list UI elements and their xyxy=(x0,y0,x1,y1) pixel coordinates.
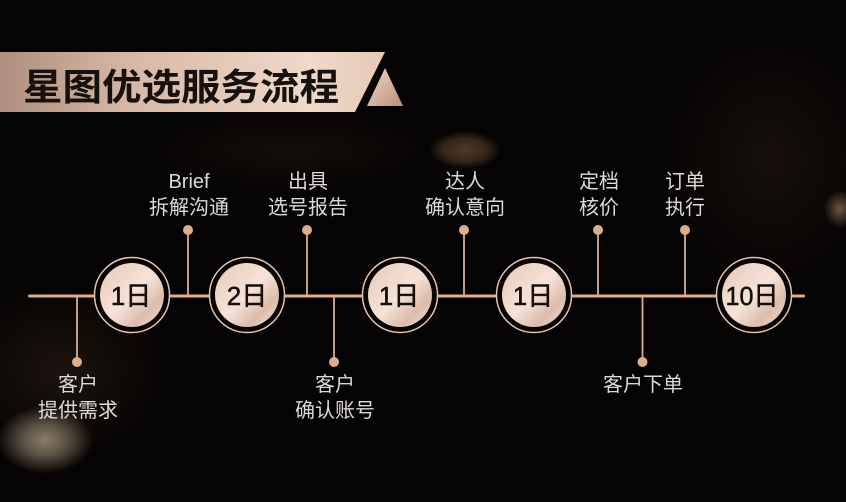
title: 星图优选服务流程 xyxy=(23,67,339,108)
step: 出具选号报告 xyxy=(268,170,348,296)
step: 客户确认账号 xyxy=(295,296,375,422)
step: 订单执行 xyxy=(665,170,705,296)
step: 客户下单 xyxy=(603,296,683,396)
node: 1日: 1日 xyxy=(111,281,151,311)
node: 2日 xyxy=(210,258,284,332)
node: 2日: 2日 xyxy=(227,281,267,311)
node: 1日: 1日 xyxy=(379,281,419,311)
node: 10日 xyxy=(716,258,792,332)
timeline axis xyxy=(28,294,805,298)
step: 订单执行: 执行 xyxy=(665,196,705,219)
step: 客户确认账号: 确认账号 xyxy=(295,399,375,422)
icon: triangle xyxy=(367,68,403,106)
step: 出具选号报告: 选号报告 xyxy=(268,196,348,219)
node: 1日: 1日 xyxy=(513,281,553,311)
node: 1日 xyxy=(362,258,438,332)
step: 客户提供需求: 提供需求 xyxy=(38,399,118,422)
step: 达人确认意向: 确认意向 xyxy=(425,196,505,219)
step: 定档核价: 核价 xyxy=(579,196,619,219)
step: 客户提供需求 xyxy=(38,296,118,422)
step: Brief 拆解沟通: 拆解沟通 xyxy=(149,196,229,219)
node: 1日 xyxy=(94,258,170,332)
node: 10日: 10日 xyxy=(726,281,778,311)
step: 客户下单: 客户下单 xyxy=(603,373,683,396)
step: 出具选号报告: 出具 xyxy=(288,170,328,193)
step: Brief 拆解沟通: Brief xyxy=(168,171,210,193)
step: 定档核价: 定档 xyxy=(579,170,619,193)
step: 订单执行: 订单 xyxy=(665,170,705,193)
step: 达人确认意向 xyxy=(425,170,505,296)
node: 1日 xyxy=(496,258,572,332)
step: 客户确认账号: 客户 xyxy=(315,373,355,396)
title banner xyxy=(0,52,385,112)
step: Brief 拆解沟通 xyxy=(149,171,229,296)
step: 定档核价 xyxy=(579,170,619,296)
step: 客户提供需求: 客户 xyxy=(58,373,98,396)
step: 达人确认意向: 达人 xyxy=(445,170,485,193)
